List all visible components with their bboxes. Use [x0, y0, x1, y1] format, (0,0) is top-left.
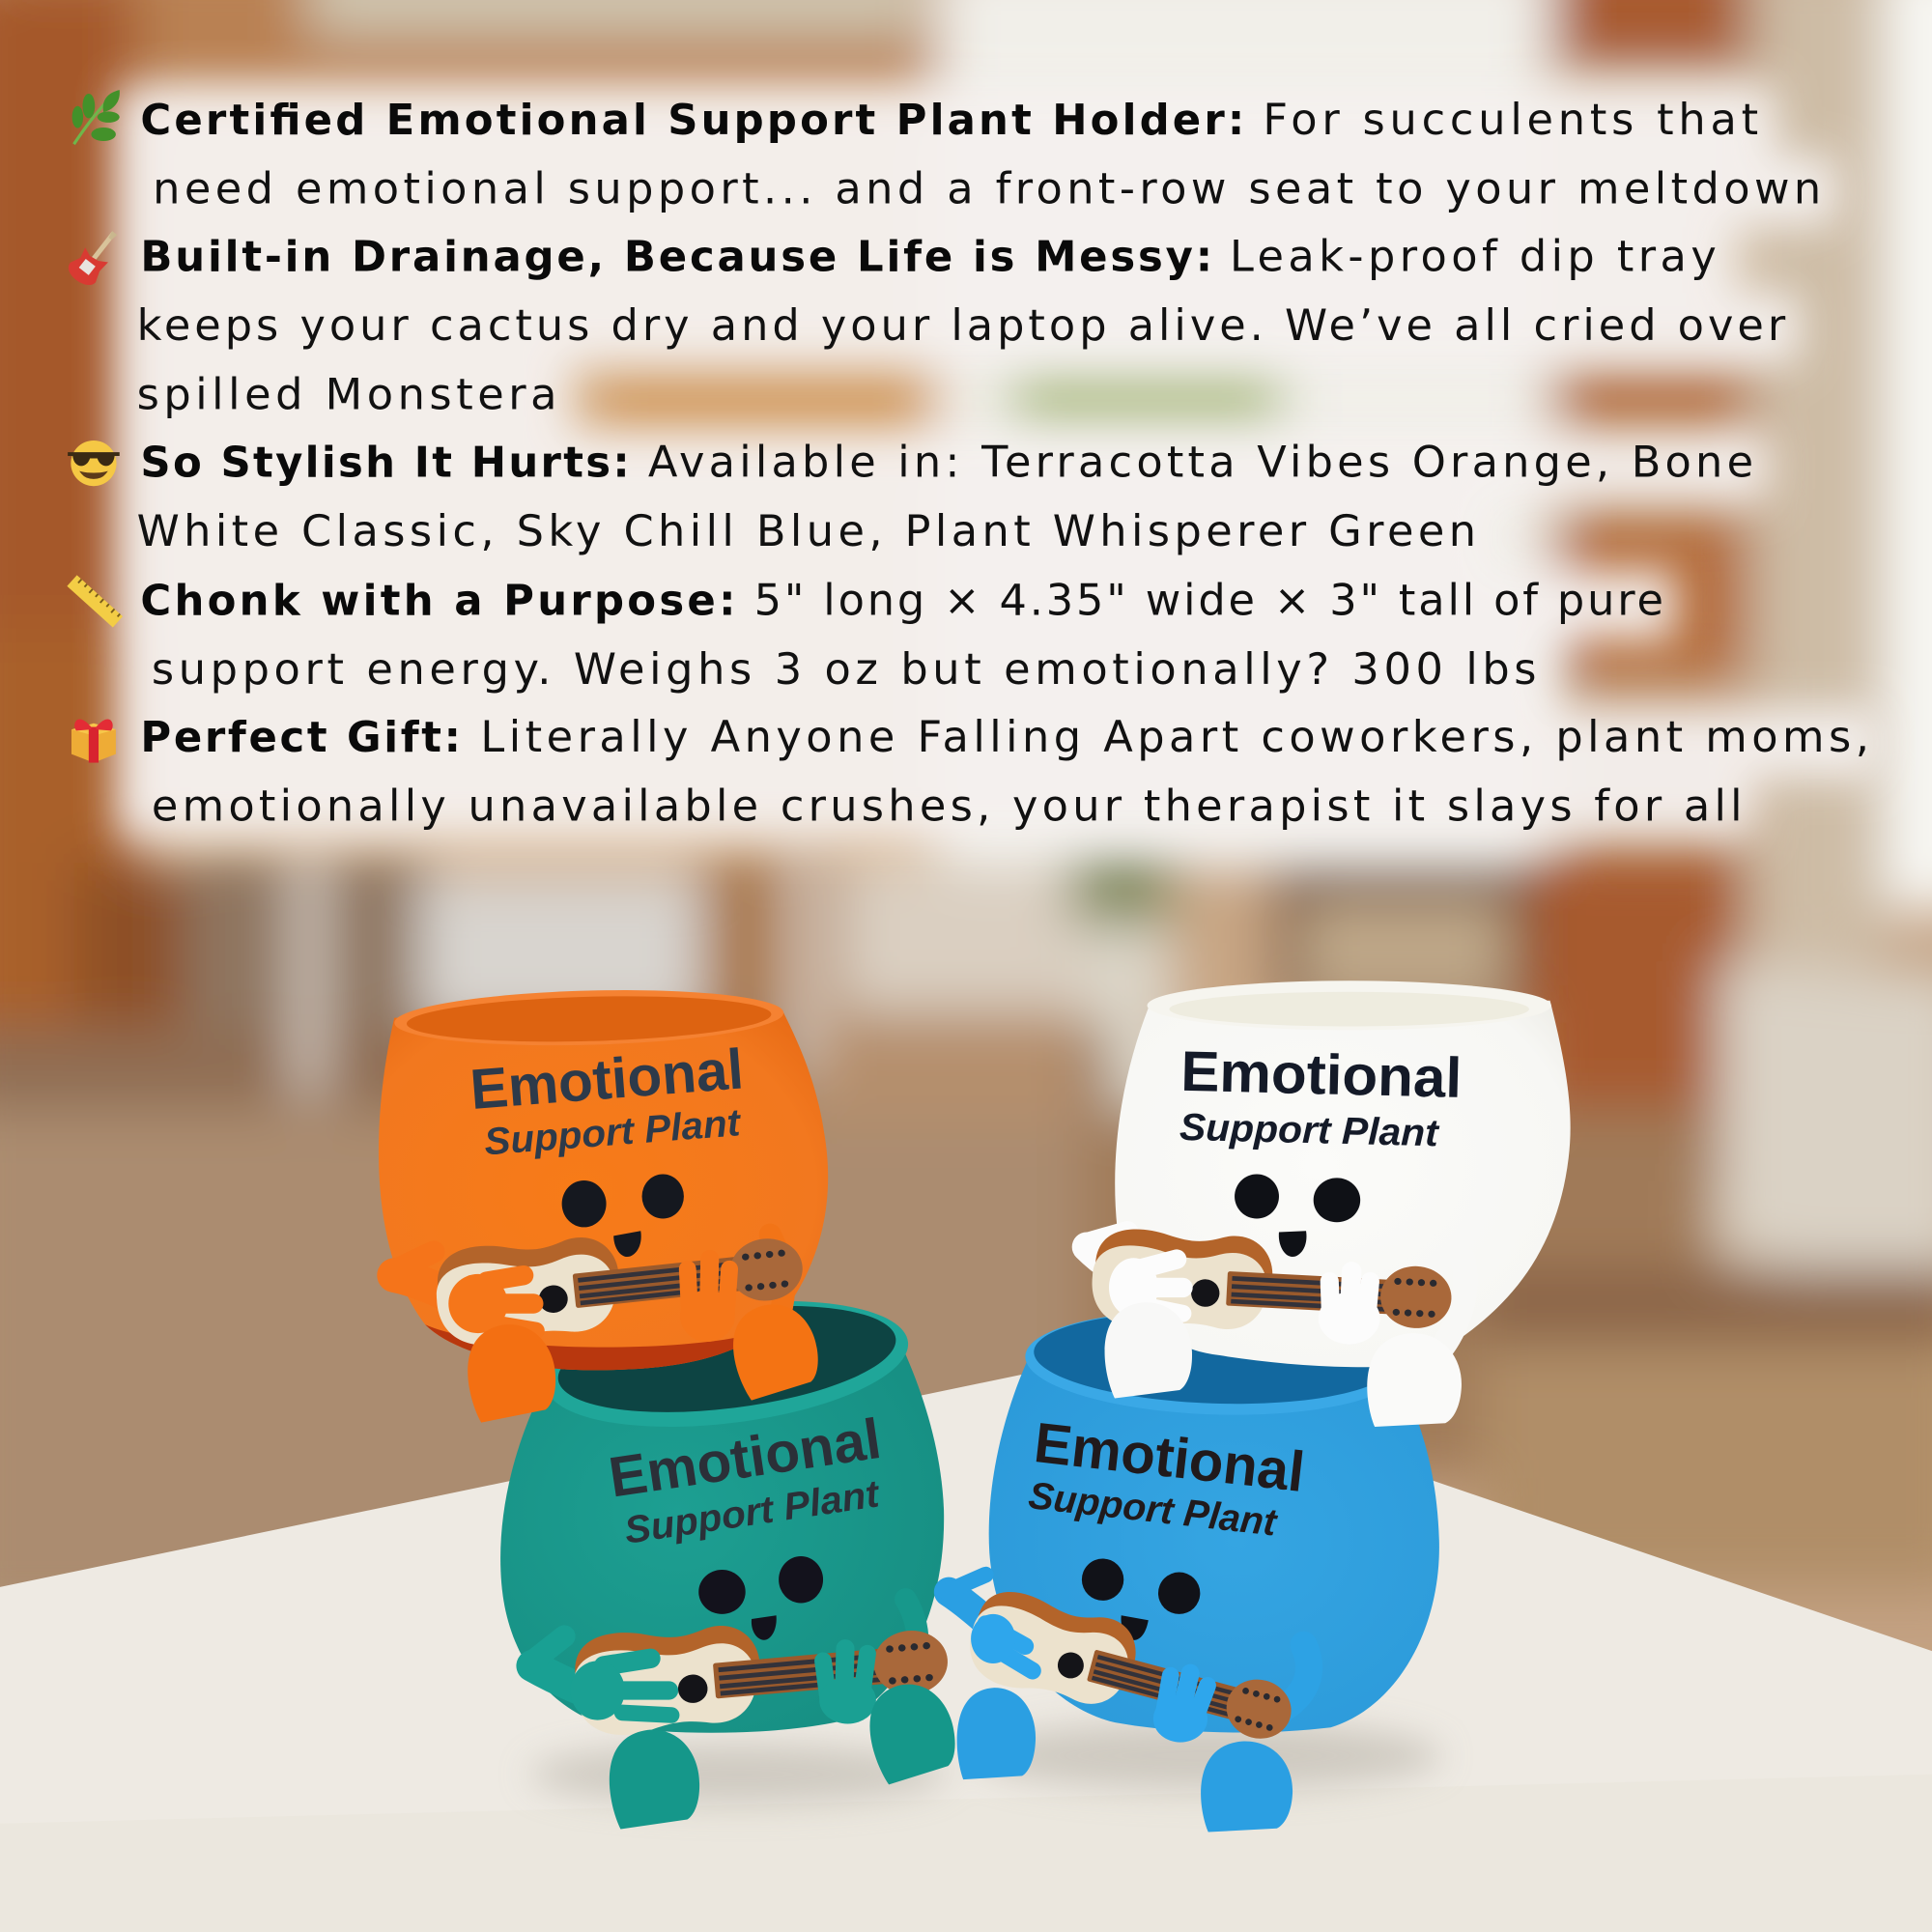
pot shadows on table [529, 1721, 1441, 1804]
feature 1 [140, 95, 1821, 213]
feature 5: Literally Anyone Falling Apart coworkers, plant moms, [480, 712, 1869, 762]
text block: features [137, 95, 1869, 831]
icon: ruler [67, 575, 123, 627]
feature 3: So Stylish It Hurts: [140, 440, 630, 488]
icon: herb sprig [72, 90, 120, 144]
pot label: blue [1026, 1411, 1308, 1547]
character: blue pot [989, 1304, 1439, 1732]
feature 5: Perfect Gift: [140, 714, 461, 762]
feature 3: Available in: Terracotta Vibes Orange, Bone [648, 438, 1753, 488]
pot label: teal [605, 1407, 892, 1553]
pot label: orange: Support Plant [483, 1101, 743, 1163]
feet: orange [461, 1319, 561, 1424]
feet: teal [605, 1726, 703, 1830]
icon: electric guitar [64, 223, 127, 290]
icon: sunglasses emoji [68, 440, 120, 486]
pot label: teal: Emotional [605, 1407, 885, 1510]
feature 3 [137, 438, 1753, 556]
face: blue [1082, 1559, 1200, 1640]
face: teal [698, 1556, 823, 1640]
pot label: orange [469, 1037, 749, 1164]
feature 5: emotionally unavailable crushes, your therapist it slays for all [152, 781, 1743, 831]
feature 2: keeps your cactus dry and your laptop alive. We’ve all cried over [137, 300, 1786, 351]
character: white pot [1115, 980, 1571, 1367]
pot label: blue: Support Plant [1026, 1474, 1280, 1545]
feature 4: 5" long × 4.35" wide × 3" tall of pure [754, 575, 1663, 625]
blue limbs and ukulele [947, 1575, 1309, 1833]
feature 2: spilled Monstera [137, 369, 557, 419]
pot label: white [1179, 1040, 1463, 1155]
feature 3: White Classic, Sky Chill Blue, Plant Whisperer Green [137, 506, 1476, 556]
soft white glow behind text [118, 86, 1880, 838]
face: orange [562, 1175, 684, 1257]
feature 2: Leak-proof dip tray [1230, 232, 1717, 282]
feature 1: Certified Emotional Support Plant Holder: [140, 97, 1244, 145]
feature 2 [137, 232, 1786, 419]
character: orange pot [379, 985, 828, 1370]
feature 1: need emotional support... and a front-row seat to your meltdown [153, 163, 1821, 213]
pot label: white: Support Plant [1179, 1106, 1440, 1154]
feature 2: Built-in Drainage, Because Life is Messy: [140, 234, 1212, 282]
icon: gift box [71, 719, 116, 763]
feature 4 [140, 575, 1663, 695]
character: teal pot [500, 1283, 944, 1733]
feet: blue [957, 1688, 1036, 1779]
feature 5 [140, 712, 1869, 831]
face: white [1235, 1175, 1360, 1257]
pot label: orange: Emotional [469, 1037, 746, 1122]
feet: white [1101, 1299, 1195, 1399]
table top [0, 1361, 1932, 1932]
pot label: teal: Support Plant [622, 1472, 883, 1552]
white limbs and ukulele [1084, 1227, 1465, 1427]
feature 1: For succulents that [1263, 95, 1758, 145]
pot label: white: Emotional [1180, 1040, 1463, 1110]
orange limbs and ukulele [392, 1213, 826, 1424]
teal limbs and ukulele [529, 1600, 963, 1830]
feature 4: support energy. Weighs 3 oz but emotionally? 300 lbs [152, 644, 1537, 695]
pot label: blue: Emotional [1031, 1411, 1308, 1504]
feature 4: Chonk with a Purpose: [140, 577, 735, 625]
